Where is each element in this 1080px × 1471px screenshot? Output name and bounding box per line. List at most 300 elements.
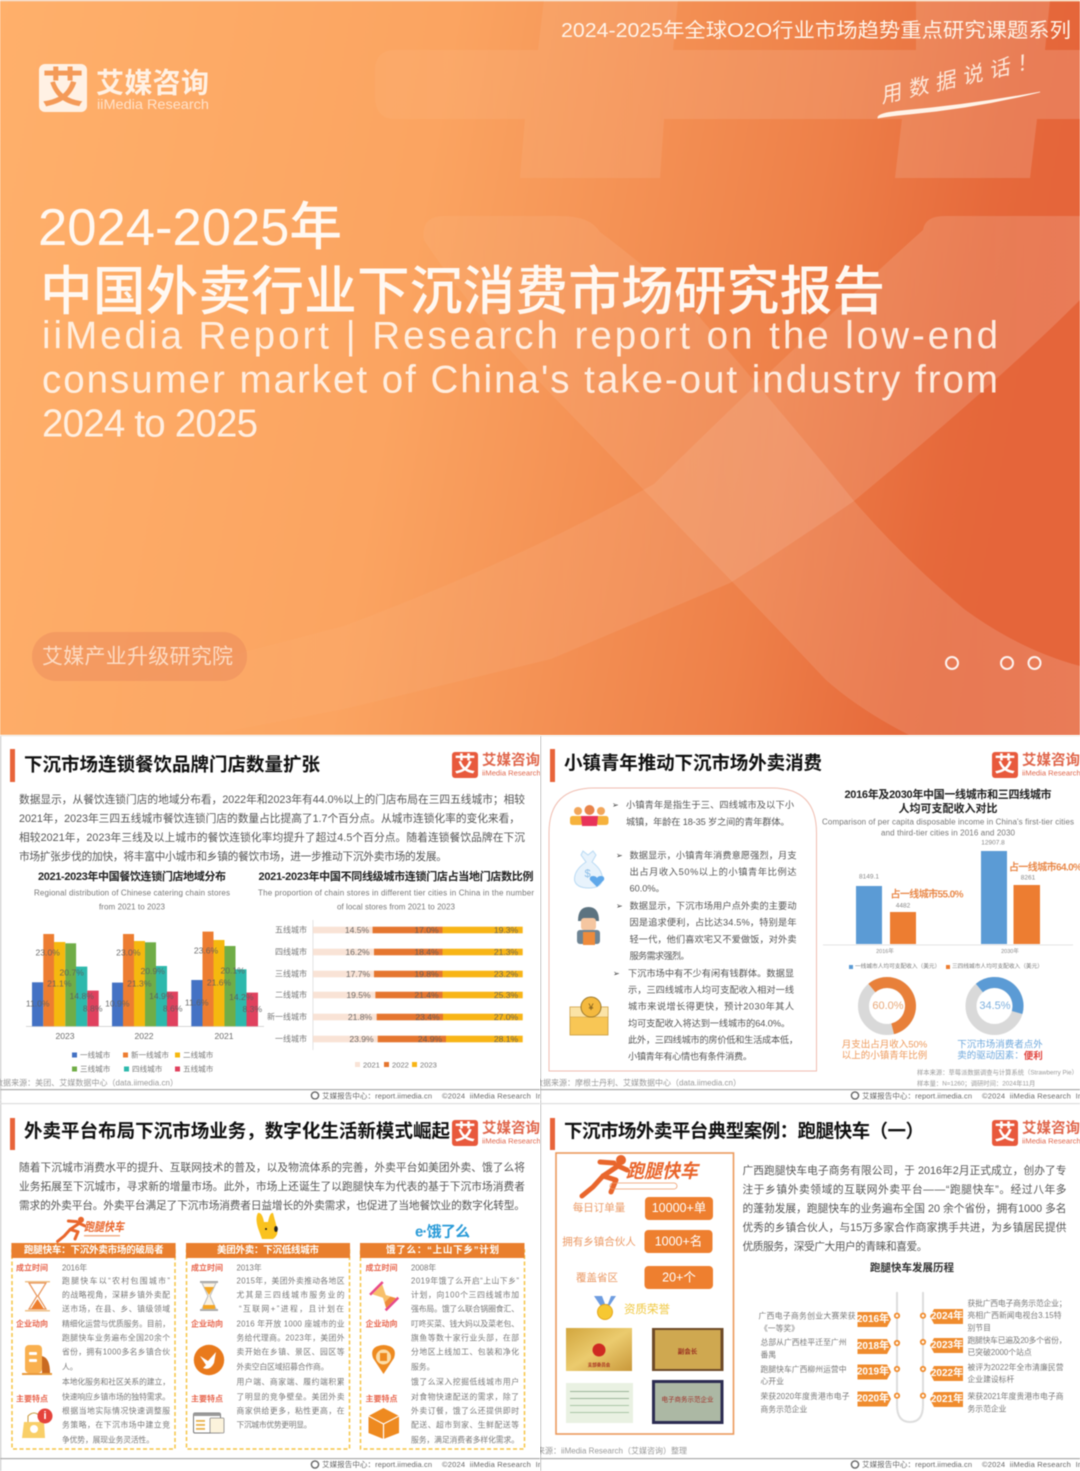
grouped bar chart: regional distribution: 2022 — [134, 1031, 154, 1041]
left chart heading: from 2021 to 2023 — [99, 902, 166, 912]
panel: case study Paotui Kuaiche — [537, 1100, 1080, 1471]
footer: 艾媒报告中心：report.iimedia.cn — [322, 1090, 432, 1100]
footer — [0, 1458, 546, 1469]
intro text: 市场扩张步伐的加快，将丰富中小城市和乡镇的餐饮市场，进一步推动下沉外卖市场的发展。 — [19, 850, 447, 863]
text: Ele.me details: 服务。 — [411, 1362, 434, 1372]
logo: iiMedia Research — [482, 1136, 541, 1146]
stacked bar chart: chain store proportion: 一线城市 — [275, 1034, 307, 1044]
card: Meituan: 美团外卖：下沉低线城市 — [217, 1244, 319, 1256]
grouped bar chart: regional distribution: 8.6% — [163, 1003, 183, 1013]
logo: Paotui Kuaiche runner: 跑腿快车 — [626, 1160, 701, 1182]
footer: 艾媒报告中心：report.iimedia.cn — [862, 1459, 972, 1469]
footer — [0, 1089, 546, 1100]
grouped bar chart: regional distribution: 10.9% — [105, 999, 130, 1009]
grouped bar chart: regional distribution: 20.1% — [221, 965, 245, 975]
grouped bar chart: regional distribution: 14.2% — [229, 992, 254, 1002]
timeline tags and dots: 2021年 — [931, 1392, 963, 1405]
bullet and text: convenience: 因是追求便利，占比达34.5%，特别是年 — [630, 917, 796, 928]
text: Paotui Kuaiche details: 的战略视角，深耕乡镇外卖配 — [62, 1290, 170, 1300]
stacked bar chart: chain store proportion: 19.5% — [346, 990, 371, 1000]
text: Ele.me details: 分地区上线加工、包装和净化 — [411, 1346, 519, 1356]
grouped bar chart: regional distribution: 21.3% — [127, 978, 152, 988]
bar chart: disposable income: 2030年 — [1001, 947, 1019, 955]
icon: money bag: $ — [584, 868, 591, 880]
stacked bar chart: chain store proportion: 17.7% — [346, 969, 371, 979]
card: Ele.me — [360, 1243, 524, 1449]
stat: covered provinces — [576, 1266, 713, 1289]
intro text — [19, 1161, 525, 1212]
bar chart legend: 三四线城市人均可支配收入（美元） — [952, 962, 1043, 970]
timeline tags and dots: 2023年 — [931, 1338, 963, 1351]
honors heading: 资质荣誉 — [624, 1303, 670, 1316]
sample note: 样本量：N=1260；调研时间：2024年11月 — [917, 1078, 1035, 1088]
icon: group of young people — [570, 805, 608, 826]
background watermark: oversized logo mark — [0, 0, 1080, 735]
text: Paotui Kuaiche details: 跑腿快车业务遍布全国20余个 — [62, 1332, 170, 1342]
stacked bar chart: chain store proportion: 新一线城市 — [267, 1012, 307, 1022]
icon: hourglass — [25, 1281, 50, 1312]
donut chart: 34.5%: 34.5% — [979, 1000, 1011, 1012]
logo: 艾媒咨询 — [482, 751, 540, 769]
caption: 34.5% donut: 卖的驱动因素：便利 — [957, 1050, 1043, 1062]
timeline tags and dots: 2024年 — [931, 1309, 963, 1322]
right chart heading: Comparison of per capita disposable income in China's first-tier cities — [822, 818, 1074, 826]
stacked bar chart: chain store proportion: 28.1% — [494, 1034, 519, 1044]
handwritten slogan: 用数据说话！ — [882, 48, 1038, 108]
timeline tags and dots — [857, 1309, 963, 1407]
stacked bar chart: chain store proportion: 27.0% — [494, 1012, 519, 1022]
stacked bar chart: chain store proportion: 三线城市 — [275, 968, 307, 978]
timeline tags and dots: 2019年 — [857, 1364, 889, 1378]
bullet and text: income: 此外，三四线城市的房价低和生活成本低， — [628, 1034, 798, 1045]
left chart heading: Regional distribution of Chinese catering chain stores — [34, 888, 230, 898]
text: Ele.me details: 配送、超市到家、生鲜配送等 — [411, 1420, 519, 1430]
text: Paotui Kuaiche details: 务策略，在下沉市场中建立竞 — [62, 1420, 170, 1430]
text: Paotui Kuaiche details: 省份，拥有1000多名乡镇合伙 — [62, 1346, 170, 1356]
right chart heading — [822, 787, 1074, 838]
stacked bar chart: chain store proportion: 21.4% — [414, 990, 439, 1000]
English subtitle: 2024 to 2025 — [42, 402, 258, 446]
timeline text: left column: 番禺 — [760, 1350, 776, 1360]
right chart legend: 2022 — [392, 1060, 409, 1070]
accent bar and heading — [550, 1118, 924, 1150]
report title: 2024-2025年 — [38, 199, 342, 257]
text: Meituan details: 2015年，美团外卖推动各地区 — [236, 1276, 345, 1286]
certificate: party committee plaque — [566, 1328, 632, 1371]
card: Meituan — [186, 1243, 350, 1449]
bullet and text: convenience: 服务需求强烈。 — [630, 950, 690, 961]
stat: town partners: 1000+名 — [655, 1234, 702, 1248]
accent bar and heading — [10, 749, 320, 782]
brand logo: iiMedia Research — [97, 96, 209, 112]
timeline text: left column: 广西电子商务创业大赛荣获 — [758, 1310, 856, 1320]
logo — [992, 1119, 1080, 1146]
text: Paotui Kuaiche details: 跑腿快车以“农村包围城市” — [62, 1276, 170, 1286]
timeline text: left column — [758, 1310, 856, 1414]
timeline text: right column: 跑腿快车已遍及20多个省份， — [968, 1335, 1066, 1345]
bullet and text: convenience: 数据显示，下沉市场用户点外卖的主要动 — [630, 900, 796, 911]
logo: 艾媒咨询 — [482, 1119, 540, 1137]
card: Ele.me: 企业动向 — [366, 1318, 398, 1328]
certificate: party committee plaque: 支部委员会 — [588, 1362, 611, 1368]
report title — [38, 199, 885, 322]
stacked bar chart: chain store proportion: 21.8% — [348, 1012, 373, 1022]
text: Paotui Kuaiche details — [62, 1262, 170, 1444]
timeline text: left column: 心开业 — [760, 1376, 784, 1386]
icon: cube — [368, 1408, 399, 1439]
grouped bar chart: regional distribution: 8.3% — [243, 1004, 262, 1014]
series title: 2024-2025年全球O2O行业市场趋势重点研究课题系列 — [561, 19, 1071, 42]
stacked bar chart: chain store proportion: 24.9% — [418, 1034, 443, 1044]
timeline tags and dots: 2018年 — [857, 1339, 889, 1352]
right chart heading — [258, 869, 534, 912]
stacked bar chart: chain store proportion: 23.9% — [349, 1034, 374, 1044]
bar chart: disposable income: 12907.8 — [981, 840, 1005, 846]
grouped bar chart: regional distribution: 20.9% — [141, 966, 165, 976]
timeline text: right column: 亮相广西新闻电视台3.15特 — [968, 1310, 1062, 1320]
text: Paotui Kuaiche details: 精细化运营与优质服务。目前， — [62, 1318, 170, 1328]
card: Paotui Kuaiche: 跑腿快车：下沉外卖市场的破局者 — [24, 1244, 164, 1256]
text: Meituan details: 务给代理商。2023年，美团外 — [236, 1332, 345, 1342]
text: Paotui Kuaiche details: 本地化服务和社区关系的建立， — [62, 1376, 170, 1386]
icon: coin and wallet — [570, 997, 608, 1035]
logo: 艾媒咨询 — [1022, 1119, 1080, 1137]
decorative rings — [946, 657, 1040, 669]
certificate: vice president plaque: 副会长 — [678, 1346, 698, 1356]
card: Paotui Kuaiche: 企业动向 — [16, 1318, 48, 1328]
icon: documents — [194, 1413, 224, 1433]
company description — [742, 1164, 1067, 1253]
company description: 优秀的乡镇合伙人，与15万多家合作商家携手共进，为乡镇居民提供 — [742, 1221, 1067, 1234]
text: Meituan details: 卖开始在乡镇、景区、园区等 — [236, 1346, 345, 1356]
panel: cover hero — [0, 0, 1080, 735]
bar chart legend — [849, 962, 1043, 970]
footer: ©2024 iiMedia Research Inc — [442, 1092, 546, 1100]
text: Meituan details: 2016 年开放 1000 座城市的业 — [236, 1318, 345, 1328]
text: Meituan details: 外卖空白区域招募合作商。 — [236, 1362, 328, 1372]
source note: 数据来源：美团、艾媒数据中心（data.iimedia.cn） — [0, 1078, 178, 1088]
sample note: 样本来源：草莓派数据调查与计算系统（Strawberry Pie） — [917, 1068, 1078, 1076]
grouped bar chart: regional distribution: 2023 — [55, 1031, 75, 1041]
donut chart: 60.0% — [864, 982, 911, 1030]
stacked bar chart: chain store proportion: 18.4% — [414, 947, 439, 957]
left chart legend: 一线城市 — [80, 1050, 111, 1060]
logo: 艾 — [454, 1122, 476, 1144]
timeline text: left column: 荣获2020年度贵港市电子 — [760, 1391, 850, 1401]
bar chart: disposable income: 占一线城市55.0% — [890, 888, 964, 900]
bullet and text: definition: ➢ — [612, 800, 619, 810]
text: Paotui Kuaiche details: 人。 — [62, 1362, 78, 1372]
stacked bar chart: chain store proportion: 16.2% — [345, 947, 370, 957]
left chart legend — [72, 1050, 214, 1074]
icon: hourglass — [200, 1281, 218, 1311]
grouped bar chart: regional distribution: 23.0% — [116, 947, 141, 957]
left chart legend: 三线城市 — [80, 1064, 111, 1074]
footer: 艾媒报告中心：report.iimedia.cn — [322, 1459, 432, 1469]
bullet and text: definition: 小镇青年是指生于三、四线城市及以下小 — [626, 799, 794, 810]
card: Meituan: 企业动向 — [191, 1318, 223, 1328]
stacked bar chart: chain store proportion — [267, 920, 523, 1050]
card: Ele.me: 饿了么：“上山下乡”计划 — [386, 1244, 499, 1256]
intro text: 相较2021年，2023年三线及以上城市的餐饮连锁化率均提升了超过4.5个百分点。随着连锁餐饮品牌在下沉 — [19, 831, 525, 844]
icon: courier — [577, 907, 600, 945]
right chart legend — [355, 1060, 437, 1070]
bullet and text: income: 示，三四线城市人均可支配收入相对一线 — [628, 984, 794, 995]
left chart heading — [34, 869, 230, 912]
grouped bar chart: regional distribution: 11.6% — [185, 998, 209, 1008]
grouped bar chart: regional distribution: 21.6% — [207, 977, 232, 987]
logo: Paotui Kuaiche — [58, 1218, 126, 1241]
left chart legend: 四线城市 — [132, 1064, 163, 1074]
stacked bar chart: chain store proportion: 二线城市 — [275, 990, 307, 1000]
logo: Ele.me: e·饿了么 — [415, 1222, 470, 1240]
timeline text: right column: 务示范企业 — [968, 1404, 1007, 1414]
left chart legend: 五线城市 — [183, 1064, 214, 1074]
company description: 优质服务，深受广大用户的青睐和喜爱。 — [742, 1240, 928, 1253]
right chart legend: 2023 — [420, 1060, 437, 1070]
stacked bar chart: chain store proportion: 五线城市 — [275, 924, 307, 934]
stat: covered provinces: 20+个 — [662, 1270, 696, 1284]
timeline text: left column: 《一等奖》 — [760, 1323, 799, 1333]
grouped bar chart: regional distribution: 21.1% — [47, 978, 72, 988]
text: Meituan details — [236, 1262, 345, 1430]
icon: shopping bag with info badge — [22, 1408, 52, 1438]
right chart legend: 2021 — [363, 1060, 380, 1070]
accent bar and heading: 外卖平台布局下沉市场业务，数字化生活新模式崛起 — [24, 1120, 450, 1142]
accent bar and heading: 小镇青年推动下沉市场外卖消费 — [564, 752, 822, 774]
right chart heading: 2021-2023年中国不同线级城市连锁门店占当地门店数比例 — [258, 869, 534, 883]
certificate: vice president plaque — [652, 1328, 724, 1371]
bullet and text: definition — [612, 799, 794, 827]
icon: money bag — [574, 851, 604, 888]
stat: town partners — [562, 1230, 712, 1253]
stacked bar chart: chain store proportion: 四线城市 — [275, 946, 307, 956]
English subtitle: iiMedia Report | Research report on the low-end — [42, 314, 998, 358]
right chart heading: 2016年及2030年中国一线城市和三四线城市 — [844, 787, 1052, 801]
text: Paotui Kuaiche details: 2016年 — [62, 1262, 87, 1272]
footer — [540, 1089, 1080, 1100]
company stats box — [556, 1153, 734, 1434]
grouped bar chart: regional distribution: 23.0% — [36, 947, 60, 957]
grouped bar chart: regional distribution: 2021 — [214, 1031, 234, 1041]
English subtitle: consumer market of China's take-out industry from — [42, 358, 998, 402]
card: Ele.me: 主要特点 — [366, 1394, 398, 1404]
icon: shopping bag with info badge: i — [43, 1410, 47, 1422]
timeline heading: 跑腿快车发展历程 — [870, 1261, 954, 1274]
bullet and text: spending: 60.0%。 — [630, 884, 665, 894]
right chart heading: The proportion of chain stores in different tier cities in China in the number — [258, 888, 534, 898]
left chart legend: 二线城市 — [183, 1050, 214, 1060]
accent bar and heading: 下沉市场连锁餐饮品牌门店数量扩张 — [24, 754, 320, 775]
left chart heading: 2021-2023年中国餐饮连锁门店地域分布 — [38, 869, 226, 883]
bullet and text: income: 均可支配收入将达到一线城市的64.0%。 — [628, 1017, 790, 1028]
timeline track — [897, 1292, 923, 1422]
institute pill — [32, 632, 247, 681]
brand logo — [39, 64, 209, 112]
grouped bar chart: regional distribution: 20.7% — [60, 967, 84, 977]
text: Meituan details: 商家供给更多，粘性更高，在 — [236, 1406, 345, 1416]
timeline text: left column: 总部从广西桂平迁至广州 — [760, 1337, 846, 1347]
footer: ©2024 iiMedia Research Inc — [442, 1460, 546, 1469]
intro text — [19, 793, 525, 863]
timeline tags and dots: 2016年 — [857, 1312, 889, 1325]
bullet and text: income: 小镇青年有心情也有条件消费。 — [628, 1051, 752, 1062]
timeline tags and dots: 2022年 — [931, 1366, 963, 1379]
bullet and text: convenience: 轻一代，他们喜欢宅又不爱做饭，对外卖 — [630, 933, 796, 944]
timeline text: left column: 商务示范企业 — [760, 1404, 807, 1414]
intro text: 2021年，2023年三四五线城市餐饮连锁门店的数量占比提高了1.7个百分点。从城市连锁化率的变化来看， — [19, 812, 520, 825]
text: Meituan details: 了明显的竞争壁垒。美团外卖 — [236, 1392, 345, 1402]
bullet and text: spending — [616, 850, 796, 894]
footer: 艾媒报告中心：report.iimedia.cn — [862, 1090, 972, 1100]
left chart legend: 新一线城市 — [131, 1050, 169, 1060]
company description: 广西跑腿快车电子商务有限公司，于 2016年2月正式成立，创办了专 — [742, 1164, 1066, 1177]
timeline tags and dots: 2020年 — [857, 1392, 889, 1404]
text: Ele.me details: 计划，向100个三四线城市加 — [411, 1290, 519, 1300]
bar chart: disposable income: 8261 — [1021, 874, 1036, 882]
stacked bar chart: chain store proportion: 19.3% — [494, 925, 519, 935]
icon: location pin — [372, 1345, 395, 1374]
text: Meituan details: 下沉城市优势更明显。 — [236, 1420, 312, 1430]
logo: Paotui Kuaiche runner — [582, 1158, 701, 1196]
text: Ele.me details: 旗鱼等数十家行业头部，在部 — [411, 1332, 519, 1342]
source note: 来源：iiMedia Research（艾媒咨询）整理 — [537, 1446, 687, 1456]
donut chart: 60.0%: 60.0% — [872, 1000, 904, 1012]
company description: 的蓬勃发展，跑腿快车的业务遍布全国 20 余个省份，拥有1000 多名 — [742, 1202, 1066, 1215]
card: Paotui Kuaiche: 成立时间 — [16, 1262, 48, 1272]
card: Meituan: 主要特点 — [191, 1394, 223, 1404]
bar chart: disposable income: 占一线城市64.0% — [1009, 860, 1080, 874]
brand logo: 艾媒咨询 — [96, 68, 209, 98]
intro text: 需求的外卖平台。外卖平台满足了下沉市场消费者日益增长的外卖需求，也促进了当地餐饮业的数字化转型。 — [19, 1199, 525, 1212]
bar chart: disposable income: 2016年 — [876, 947, 894, 955]
bullet and text: definition: 城镇，年龄在 18-35 岁之间的青年群体。 — [626, 816, 790, 827]
company description: 注于乡镇外卖领域的互联网外卖平台——“跑腿快车”。经过八年多 — [742, 1183, 1067, 1196]
stacked bar chart: chain store proportion: 19.8% — [414, 969, 439, 979]
stat: covered provinces: 覆盖省区 — [576, 1271, 618, 1284]
right chart heading: 人均可支配收入对比 — [898, 801, 998, 815]
text: Ele.me details: 2019年饿了么开启“上山下乡” — [411, 1276, 519, 1286]
bullet and text: income — [613, 967, 798, 1062]
accent bar and heading: 下沉市场外卖平台典型案例：跑腿快车（一） — [564, 1120, 924, 1142]
bullet and text: convenience: ➢ — [616, 902, 623, 910]
logo: iiMedia Research — [1022, 768, 1080, 778]
accent bar and heading — [550, 749, 822, 782]
intro text: 随着下沉城市消费水平的提升、互联网技术的普及，以及物流体系的完善，外卖平台如美团外卖、饿了么将 — [19, 1161, 525, 1174]
bullet and text: income: 城市来说增长得更快，预计2030年其人 — [628, 1001, 794, 1012]
logo — [452, 751, 541, 778]
grouped bar chart: regional distribution — [26, 932, 264, 1041]
logo — [452, 1119, 541, 1146]
panel: chain restaurant store expansion — [0, 735, 546, 1100]
stacked bar chart: chain store proportion: 17.0% — [414, 925, 439, 935]
source note: 数据来源：摩根士丹利、艾媒数据中心（data.iimedia.cn） — [535, 1078, 741, 1088]
text: Ele.me details — [411, 1262, 519, 1444]
card: Paotui Kuaiche — [11, 1243, 176, 1449]
text: Ele.me details: 叮咚买菜、钱大妈以及菜老包、 — [411, 1318, 519, 1328]
grouped bar chart: regional distribution: 14.9% — [149, 991, 174, 1001]
bar chart: disposable income: 4482 — [896, 902, 911, 910]
timeline text: right column: 被评为2022年全市清廉民营 — [968, 1362, 1064, 1372]
right chart heading: of local stores from 2021 to 2023 — [337, 902, 456, 912]
caption: 34.5% donut — [957, 1038, 1043, 1062]
logo: Meituan rabbit — [256, 1213, 278, 1239]
grouped bar chart: regional distribution: 14.8% — [70, 991, 94, 1001]
stacked bar chart: chain store proportion: 25.3% — [494, 990, 519, 1000]
accent bar and heading — [10, 1118, 450, 1150]
grouped bar chart: regional distribution: 8.8% — [83, 1003, 103, 1013]
intro text: 业务拓展至下沉城市，寻求新的增量市场。此外，市场上还诞生了以跑腿快车为代表的基于下沉市场消费者 — [19, 1180, 525, 1193]
logo: iiMedia Research — [1022, 1136, 1080, 1146]
text: Meituan details: “互联网+”进程，且计划在 — [239, 1304, 344, 1314]
stacked bar chart: chain store proportion: 23.2% — [494, 969, 519, 979]
icon: tilted hourglass — [369, 1281, 399, 1311]
caption: 60.0% donut: 以上的小镇青年比例 — [842, 1050, 927, 1062]
bullet and text: income: 下沉市场中有不少有闲有钱群体。数据显 — [628, 967, 794, 978]
logo: 艾媒咨询 — [1022, 751, 1080, 769]
text: Ele.me details: 服务，满足消费者多样化需求。 — [411, 1434, 519, 1444]
timeline text: right column: 企业建设标杆 — [968, 1374, 1014, 1384]
timeline text: right column — [968, 1298, 1066, 1414]
stat: daily orders: 10000+单 — [652, 1201, 706, 1215]
right chart heading: and third-tier cities in 2016 and 2030 — [881, 828, 1016, 838]
bar chart legend: 一线城市人均可支配收入（美元） — [855, 962, 940, 970]
stat: daily orders: 每日订单量 — [573, 1201, 626, 1214]
timeline text: right column: 已突破2000个站点 — [968, 1347, 1032, 1357]
caption: 60.0% donut — [842, 1038, 928, 1062]
icon: building — [22, 1345, 52, 1375]
card: Paotui Kuaiche: 主要特点 — [16, 1394, 48, 1404]
icon: dove in circle — [194, 1345, 224, 1375]
text: Meituan details: 用户端、商家端、履约端积累 — [236, 1376, 345, 1386]
icon: coin and wallet: ¥ — [587, 1002, 594, 1012]
footer — [540, 1458, 1080, 1469]
grouped bar chart: regional distribution: 23.6% — [194, 945, 219, 955]
intro text: 数据显示，从餐饮连锁门店的地域分布看，2022年和2023年有44.0%以上的门店布局在三四五线城市；相较 — [19, 793, 525, 806]
text: Paotui Kuaiche details: 争优势，展现业务灵活性。 — [62, 1434, 154, 1444]
text: Paotui Kuaiche details: 快速响应乡镇市场的独特需求。 — [62, 1392, 170, 1402]
bar chart: disposable income — [823, 840, 1080, 955]
text: Ele.me details: 强布局。饿了么联合锅圈食汇、 — [411, 1304, 519, 1314]
icon: medal — [594, 1296, 616, 1320]
card: Ele.me: 成立时间 — [366, 1262, 398, 1272]
text: Paotui Kuaiche details: 根据当地实际情况快速调整服 — [62, 1406, 170, 1416]
English subtitle — [42, 314, 998, 446]
bar chart: disposable income: 8149.1 — [859, 874, 879, 880]
timeline text: right column: 荣获2021年度贵港市电子商 — [968, 1391, 1064, 1401]
bullet and text: convenience — [616, 900, 796, 961]
text: Meituan details: 尤其是三四线城市服务业的 — [236, 1290, 345, 1300]
certificate: e-commerce demonstration plaque — [652, 1380, 724, 1424]
text: Meituan details: 2013年 — [236, 1262, 262, 1272]
sample note — [917, 1068, 1078, 1088]
timeline text: right column: 获批广西电子商务示范企业； — [968, 1298, 1066, 1308]
logo: Paotui Kuaiche: 跑腿快车 — [84, 1220, 126, 1234]
timeline text: left column: 跑腿快车广西柳州运营中 — [760, 1364, 847, 1374]
bullet and text: spending: 出占月收入50%以上的小镇青年比例达 — [630, 866, 796, 877]
institute pill: 艾媒产业升级研究院 — [42, 646, 233, 668]
logo — [992, 751, 1080, 778]
certificate: e-commerce demonstration plaque: 电子商务示范企业 — [662, 1394, 714, 1404]
text: Ele.me details: 2008年 — [411, 1262, 436, 1272]
stacked bar chart: chain store proportion: 23.4% — [415, 1012, 440, 1022]
bullet and text: income: ➢ — [613, 969, 620, 978]
stacked bar chart: chain store proportion: 21.3% — [494, 947, 519, 957]
caption: 60.0% donut: 月支出占月收入50% — [842, 1038, 928, 1050]
logo: 艾 — [994, 754, 1016, 776]
bullet and text: spending: ➢ — [616, 851, 623, 860]
logo: iiMedia Research — [482, 768, 541, 778]
